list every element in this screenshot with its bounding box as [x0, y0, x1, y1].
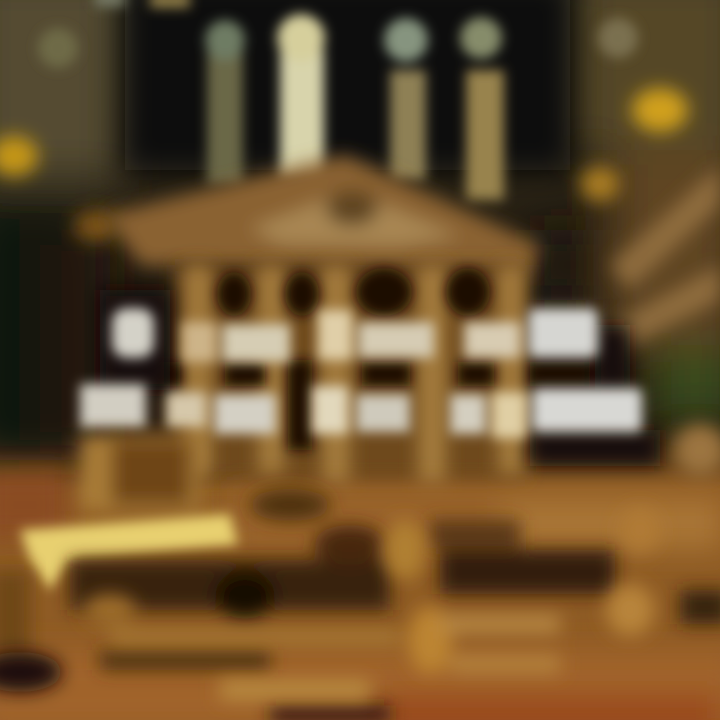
- building facade: [175, 265, 525, 480]
- white blurred lettering, upper row: [112, 308, 598, 362]
- foreground gold base: [0, 470, 720, 720]
- amber block on the left: [80, 435, 200, 511]
- upper columns: [38, 0, 638, 200]
- dark foreground shadows: [0, 489, 720, 720]
- upper left wall: [0, 0, 120, 460]
- bright golden slab: [20, 514, 238, 590]
- glowing lamps: [0, 88, 688, 242]
- white blurred lettering, lower row: [80, 384, 642, 438]
- upper right wall: [530, 0, 720, 425]
- left dark pedestal: [0, 570, 30, 655]
- dark arches between columns: [140, 268, 590, 450]
- gold foreground highlights: [84, 424, 720, 700]
- pediment: [105, 155, 540, 275]
- dark backdrop behind columns: [125, 0, 570, 170]
- right side diagonal beams: [610, 165, 720, 350]
- facade columns: [185, 265, 524, 485]
- dark band behind white lettering: [100, 290, 660, 466]
